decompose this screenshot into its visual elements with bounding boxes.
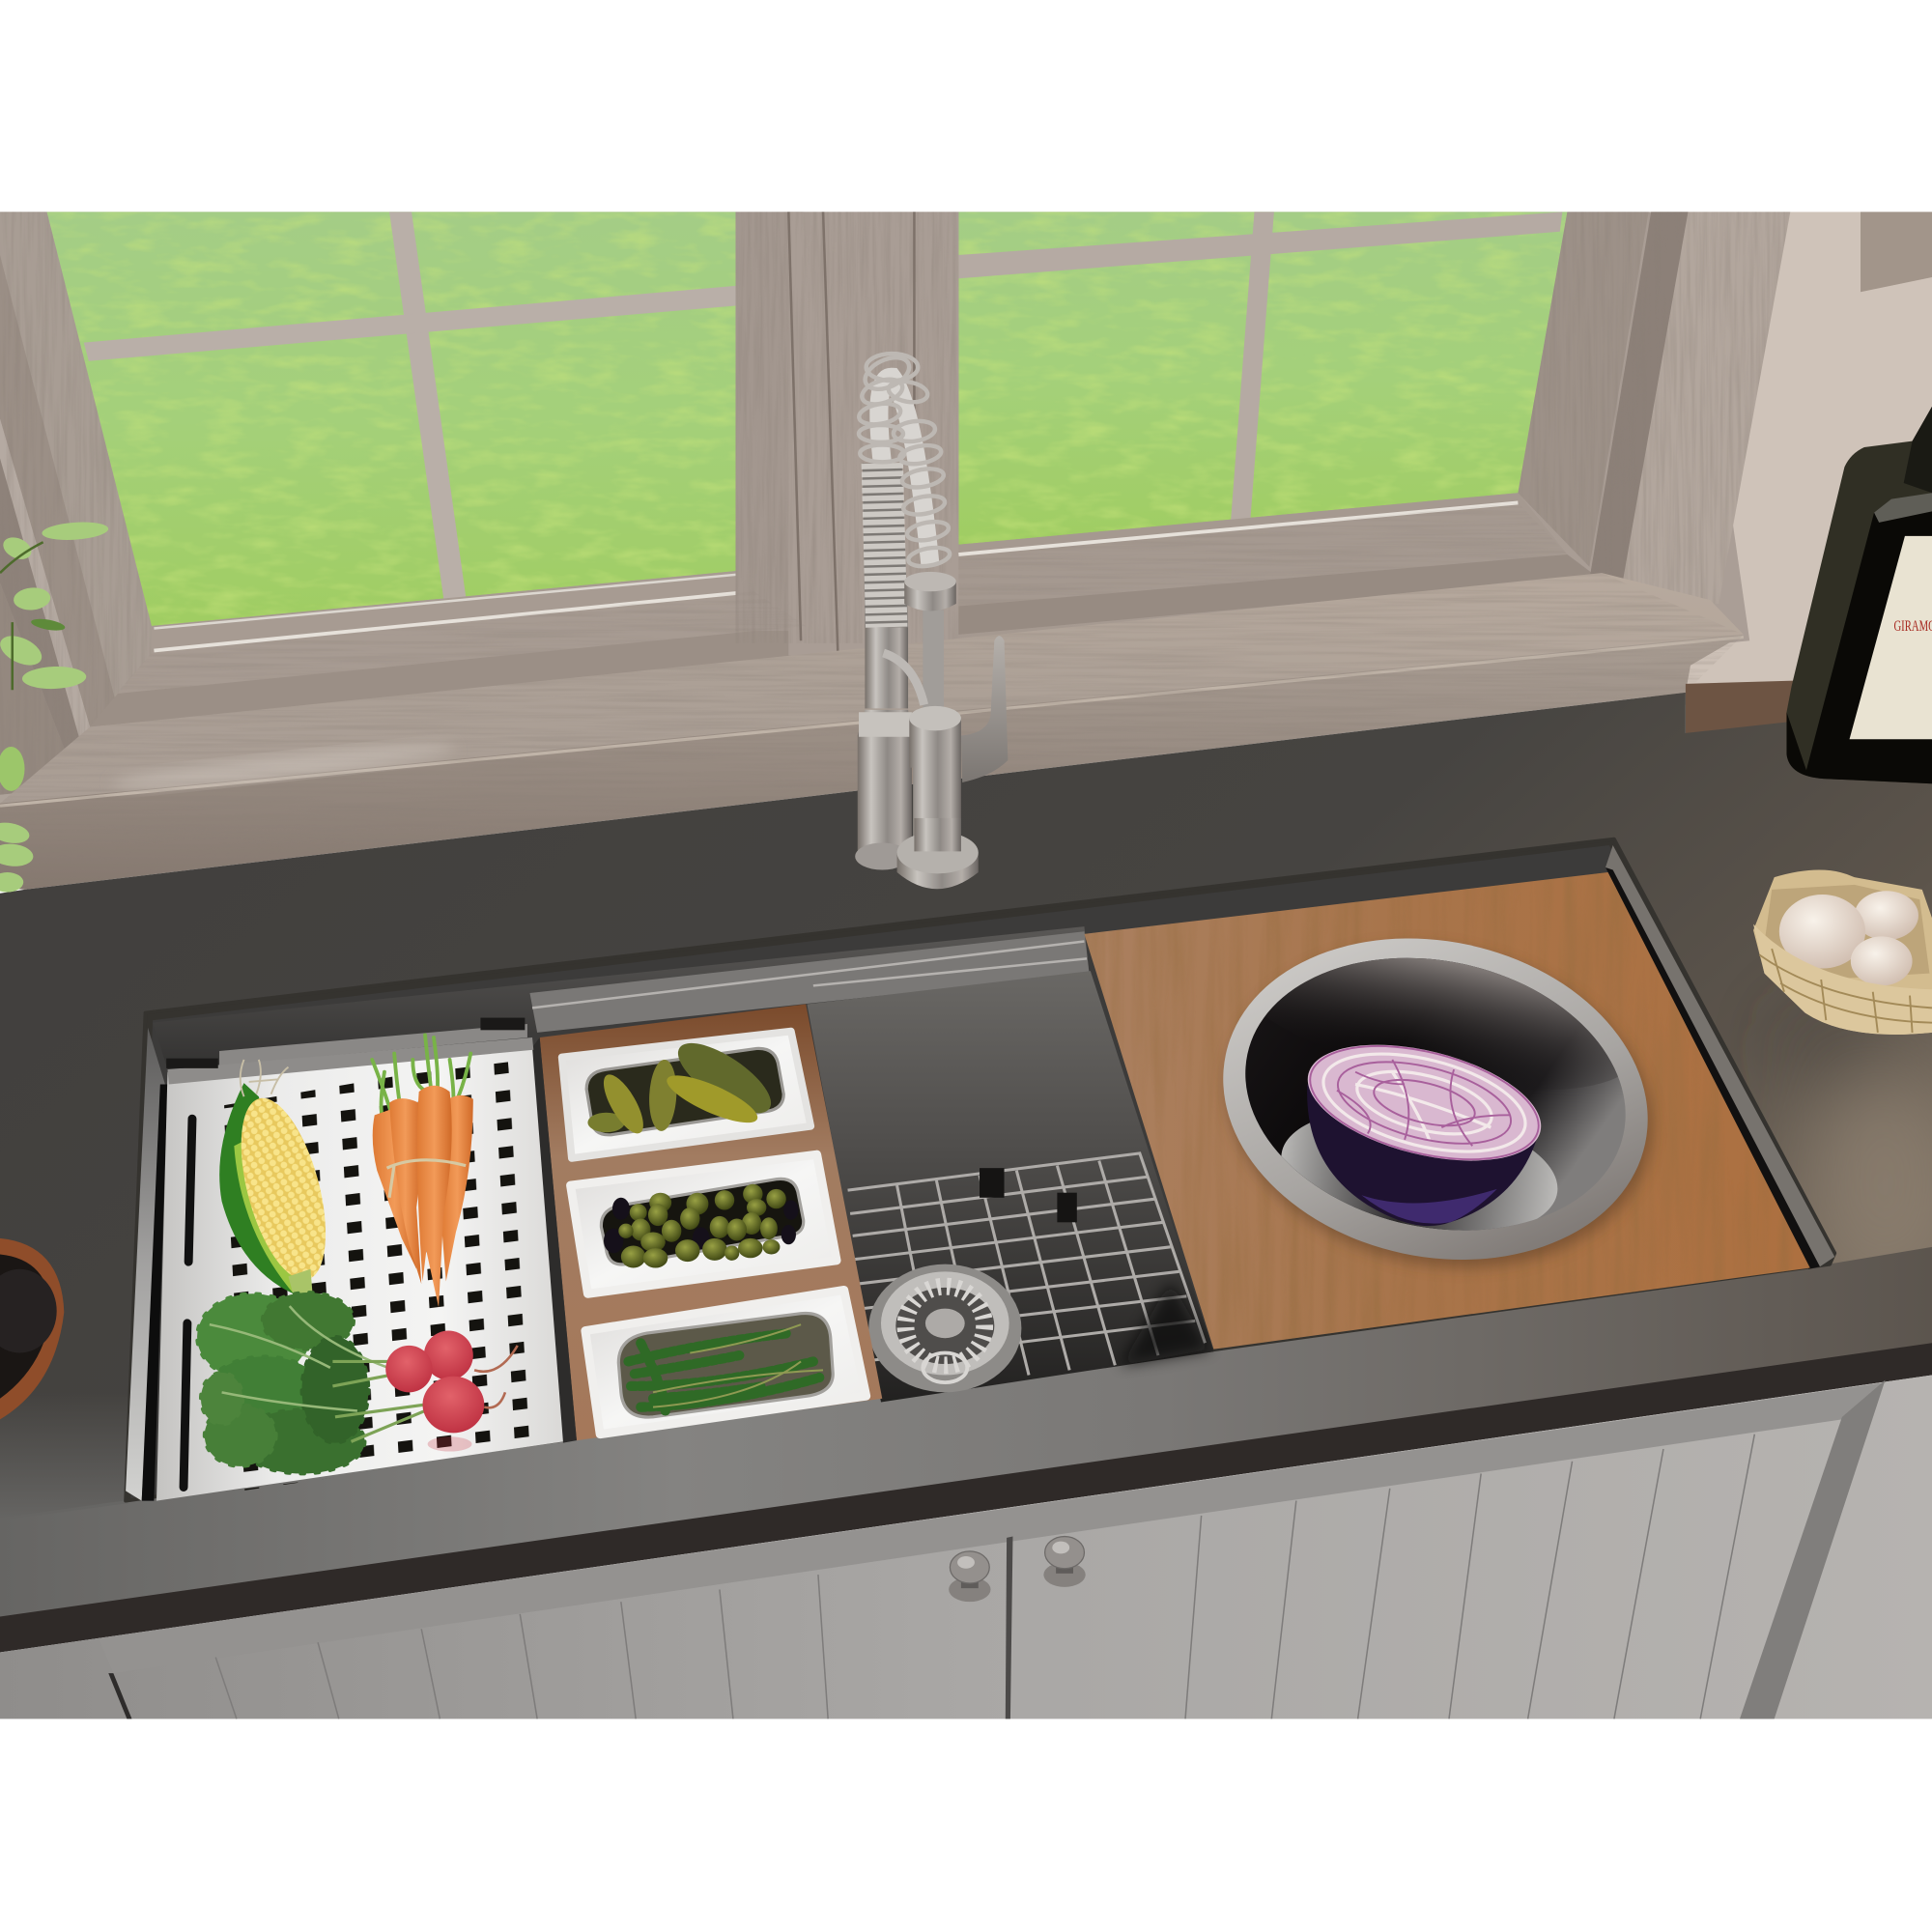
left drain gap: [142, 1084, 167, 1501]
cutting board: [1084, 872, 1810, 1350]
bottle: [1786, 407, 1932, 783]
rear body lower: [858, 710, 912, 864]
vertical wood grain on frame: [0, 212, 1790, 795]
basin: [807, 971, 1213, 1403]
bowl interior contents: [1268, 958, 1618, 1231]
corn cob: [219, 1060, 342, 1303]
carrot tops: [372, 1035, 470, 1115]
wire grid: [848, 1153, 1205, 1386]
window: [0, 212, 1790, 813]
sill highlight: [111, 737, 456, 795]
carrots bundle: [372, 1035, 473, 1307]
bowl upper wall reflection: [1268, 958, 1618, 1087]
garlic bulbs: [1855, 891, 1918, 940]
base cabinet: [0, 1375, 1932, 1719]
woven basket front: [1753, 924, 1932, 1035]
right window pane with lawn: [958, 212, 1567, 545]
right sink wall: [1605, 845, 1834, 1266]
dark basin corner: [1122, 1282, 1210, 1365]
bottle label: [1850, 536, 1932, 739]
sink interior: [130, 845, 1824, 1498]
right muntins: [958, 212, 1562, 535]
radish stems: [332, 1361, 425, 1441]
right stile and casing: [1518, 212, 1649, 567]
steel bowl: [1221, 939, 1658, 1273]
faucet: [855, 352, 1008, 889]
upper coil rings: [858, 352, 952, 569]
counter front dark edge: [0, 1343, 1932, 1652]
container: pickles: [562, 1031, 810, 1158]
left muntins: [84, 212, 737, 616]
bowl floor: [1281, 1122, 1557, 1231]
spray head collar: [904, 573, 956, 611]
rear ledge rails: [153, 926, 1090, 1069]
right cabinet post: [1740, 1380, 1886, 1719]
basket back and interior: [1753, 870, 1932, 1035]
left window pane with lawn: [46, 212, 754, 626]
wall bracket top right: [1861, 212, 1932, 292]
centre mullion: [735, 212, 804, 631]
front body: [909, 709, 961, 850]
countertop: [0, 693, 1932, 1624]
hose: [879, 377, 930, 565]
red cabbage: [1295, 1024, 1552, 1226]
garlic basket: [1753, 870, 1932, 1035]
coiled neck: [863, 464, 908, 627]
counter left shading: [0, 1392, 128, 1520]
radish greens: [197, 1293, 425, 1474]
strainer basket: [868, 1264, 1021, 1392]
right drain gap: [1605, 867, 1820, 1269]
lawn mottling: [46, 212, 1567, 626]
knob right: [1043, 1537, 1086, 1587]
perforation holes: [224, 1057, 540, 1493]
curved link hose: [884, 653, 924, 705]
wooden caddy: [540, 1005, 882, 1440]
container: olives: [571, 1154, 837, 1293]
perforated colander tray: [156, 1018, 563, 1501]
rear base: [855, 842, 909, 870]
left cabinet gap: [108, 1673, 131, 1719]
counter front apron area: [0, 1247, 1932, 1624]
door gap: [1006, 1537, 1012, 1719]
right sash bottom rail: [958, 493, 1567, 607]
door panel grooves: [215, 1435, 1754, 1719]
left sash bottom rail: [116, 569, 806, 694]
rear body upper: [865, 627, 908, 708]
plant leaves: [0, 520, 109, 892]
drain slots: [184, 1119, 192, 1488]
sink rim: [126, 839, 1834, 1501]
wall behind window: [1651, 212, 1932, 705]
gap between tray and caddy: [532, 1037, 577, 1443]
knob left: [949, 1551, 991, 1602]
twine: [387, 1160, 466, 1198]
container: thyme: [585, 1290, 867, 1435]
handle lever: [961, 636, 1008, 782]
wall skirting strip behind bottle: [1686, 680, 1811, 737]
counter marbling: [1780, 1010, 1932, 1293]
radishes: [385, 1331, 518, 1452]
fruit bowl: [0, 1238, 64, 1419]
horizontal wood grain on rails: [116, 502, 1567, 694]
left sink wall: [126, 1028, 165, 1501]
corn silk: [241, 1060, 288, 1096]
sink: [126, 839, 1834, 1501]
grid bumpers: [980, 1168, 1077, 1222]
window frame: [0, 212, 1749, 813]
window sill: [0, 573, 1744, 890]
left side casing: [0, 212, 152, 697]
front base: [897, 853, 979, 889]
